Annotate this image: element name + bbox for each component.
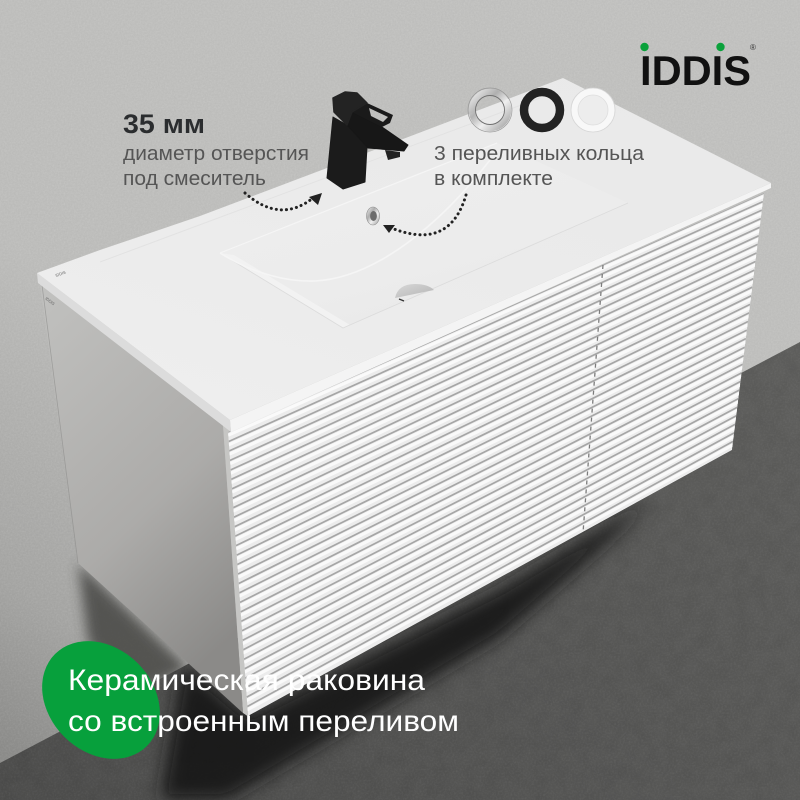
basin front wall xyxy=(220,253,350,328)
black ring xyxy=(524,92,560,128)
registered mark: ® xyxy=(750,43,756,52)
back raised lip xyxy=(100,98,540,262)
overflow rings set xyxy=(468,88,615,132)
clear ring xyxy=(468,88,512,132)
cabinet corner strip xyxy=(223,425,249,717)
faucet xyxy=(327,92,408,189)
description xyxy=(123,142,309,190)
callout: overflow rings: 3 переливных кольца xyxy=(434,142,645,165)
description: диаметр отверстия xyxy=(123,142,309,165)
brand mark on counter: IDDIS xyxy=(55,269,67,278)
floor xyxy=(0,342,800,800)
callout: hole diameter xyxy=(123,109,309,190)
wall shadow under cabinet xyxy=(78,563,188,702)
faucet head xyxy=(333,92,367,125)
counter left edge xyxy=(37,273,231,432)
counter front edge xyxy=(230,183,771,432)
headline xyxy=(68,664,459,738)
ribbed door fronts xyxy=(228,193,764,716)
cabinet side back edge xyxy=(42,285,78,563)
headline: со встроенным переливом xyxy=(68,705,459,738)
description: под смеситель xyxy=(123,167,266,190)
brand mark on side: IDDIS xyxy=(44,296,56,307)
basin recess xyxy=(220,143,628,328)
overflow ring xyxy=(366,207,380,225)
arrow: to overflow ring xyxy=(383,195,466,235)
arrow: to faucet hole xyxy=(245,193,322,210)
faucet handle loop xyxy=(352,103,393,127)
faucet body xyxy=(327,117,367,189)
door seam xyxy=(583,265,603,533)
faucet spout xyxy=(347,112,408,151)
headline: Керамическая раковина xyxy=(68,664,425,697)
vanity cabinet xyxy=(40,193,764,717)
drain xyxy=(395,284,434,301)
faucet aerator xyxy=(385,150,400,160)
callout: overflow rings xyxy=(434,142,645,190)
logo green dots xyxy=(640,43,725,51)
logo: IDDIS: IDDIS xyxy=(640,47,751,94)
value: 35 мм xyxy=(123,109,205,139)
basin flow curve xyxy=(220,160,490,281)
white ring xyxy=(571,88,615,132)
counter top surface xyxy=(37,78,771,420)
callout: overflow rings: в комплекте xyxy=(434,167,553,190)
ceramic countertop xyxy=(37,78,771,432)
cabinet side panel xyxy=(40,283,243,713)
green accent blob xyxy=(18,617,184,783)
